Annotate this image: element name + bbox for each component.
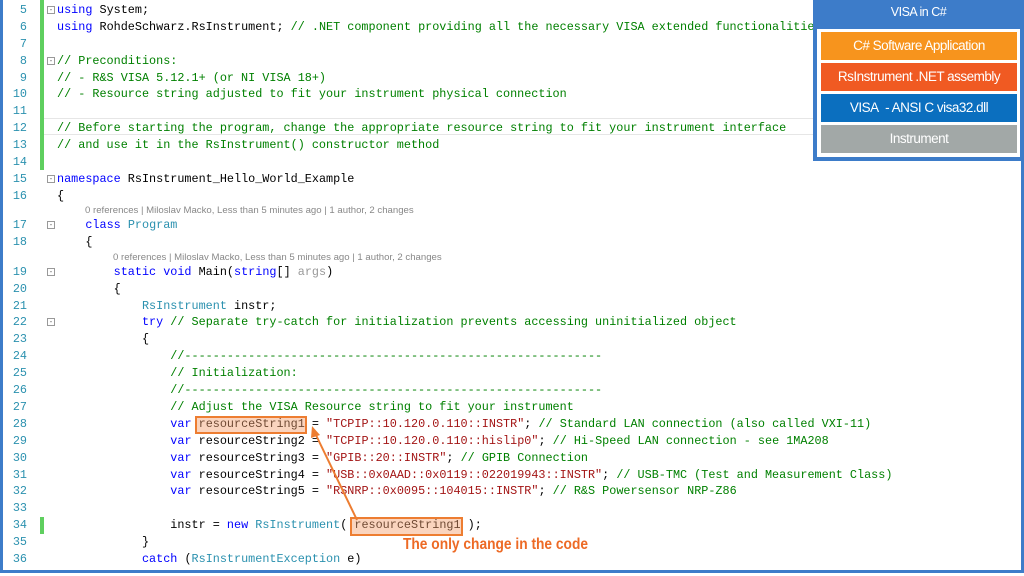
code editor: 23 [13, 332, 27, 346]
code editor: // Adjust the VISA Resource string to fit your instrument [170, 400, 574, 414]
code editor: 36 [13, 552, 27, 566]
code editor: 8 [20, 54, 27, 68]
code editor: 16 [13, 189, 27, 203]
code editor: } [142, 535, 149, 549]
layer: C# Software Application: C# Software Application [853, 38, 985, 53]
highlight: resourceString1 declaration [195, 416, 307, 434]
panel title: VISA in C# [891, 5, 946, 19]
code editor: 25 [13, 366, 27, 380]
panel: VISA in C# [813, 0, 1024, 161]
code editor: - [50, 220, 52, 229]
code editor: // Initialization: [170, 366, 298, 380]
code editor: // - R&S VISA 5.12.1+ (or NI VISA 18+) [57, 71, 326, 85]
code editor: instr = new RsInstrument( resourceString1 ); [170, 518, 482, 532]
code lines [57, 3, 892, 566]
layer: RsInstrument .NET assembly [821, 63, 1017, 91]
code editor: 7 [20, 37, 27, 51]
code editor: 27 [13, 400, 27, 414]
code editor: 13 [13, 138, 27, 152]
code editor: { [114, 282, 121, 296]
code editor: 35 [13, 535, 27, 549]
code editor: 15 [13, 172, 27, 186]
code editor: var resourceString5 = "RSNRP::0x0095::104015::INSTR"; // R&S Powersensor NRP-Z86 [170, 484, 737, 498]
code editor: RsInstrument instr; [142, 299, 276, 313]
code editor: 28 [13, 417, 27, 431]
layer: C# Software Application [821, 32, 1017, 60]
code editor: 14 [13, 155, 27, 169]
code editor: 21 [13, 299, 27, 313]
code editor: 10 [13, 87, 27, 101]
code editor: // Before starting the program, change the appropriate resource string to fit your instrument interface [57, 121, 786, 135]
code editor: 32 [13, 484, 27, 498]
code editor: - [50, 267, 52, 276]
code editor: try // Separate try-catch for initialization prevents accessing uninitialized object [142, 315, 737, 329]
code editor: //----------------------------------------------------------- [170, 349, 602, 363]
code editor: // Preconditions: [57, 54, 177, 68]
code editor: var resourceString2 = "TCPIP::10.120.0.110::hislip0"; // Hi-Speed LAN connection - see 1MA208 [170, 434, 829, 448]
code editor: 26 [13, 383, 27, 397]
code editor: { [57, 189, 64, 203]
code editor: - [50, 5, 52, 14]
code editor: 12 [13, 121, 27, 135]
code editor: 6 [20, 20, 27, 34]
code editor: { [142, 332, 149, 346]
code editor: 22 [13, 315, 27, 329]
code editor: 11 [13, 104, 27, 118]
code editor: 31 [13, 468, 27, 482]
code editor: var resourceString4 = "USB::0x0AAD::0x0119::022019943::INSTR"; // USB-TMC (Test and Measurement Class) [170, 468, 892, 482]
code editor: static void Main(string[] args) [114, 265, 333, 279]
code editor: 29 [13, 434, 27, 448]
change bar [40, 0, 44, 170]
code editor: namespace RsInstrument_Hello_World_Example [57, 172, 354, 186]
code editor: // and use it in the RsInstrument() constructor method [57, 138, 439, 152]
code editor: - [50, 174, 52, 183]
code editor: - [50, 56, 52, 65]
code editor: 0 references | Miloslav Macko, Less than 5 minutes ago | 1 author, 2 changes [113, 252, 442, 263]
line numbers [13, 3, 27, 566]
code editor: using System; [57, 3, 149, 17]
callout text: The only change in the code [403, 536, 588, 553]
layer: VISA ANSI C: VISA - ANSI C visa32.dll [850, 100, 988, 115]
code editor: 30 [13, 451, 27, 465]
code editor: 20 [13, 282, 27, 296]
layer: Instrument: Instrument [890, 131, 948, 146]
code editor: - [50, 317, 52, 326]
layer: RsInstrument .NET assembly: RsInstrument .NET assembly [838, 69, 1000, 84]
code editor: 24 [13, 349, 27, 363]
code editor: var resourceString1 = "TCPIP::10.120.0.110::INSTR"; // Standard LAN connection (also called VXI-11) [170, 417, 871, 431]
code editor: var resourceString3 = "GPIB::20::INSTR"; // GPIB Connection [170, 451, 588, 465]
code editor: 33 [13, 501, 27, 515]
code editor: 5 [20, 3, 27, 17]
layer: Instrument [821, 125, 1017, 153]
code editor: //----------------------------------------------------------- [170, 383, 602, 397]
code editor: using RohdeSchwarz.RsInstrument; // .NET component providing all the necessary VISA extended functionalities [57, 20, 822, 34]
layer: VISA ANSI C [821, 94, 1017, 122]
code editor: // - Resource string adjusted to fit your instrument physical connection [57, 87, 567, 101]
code editor: 18 [13, 235, 27, 249]
code editor: 9 [20, 71, 27, 85]
highlight: resourceString1 usage [350, 517, 463, 536]
code editor: { [85, 235, 92, 249]
codelens annotations: 0 references | Miloslav Macko, Less than 5 minutes ago | 1 author, 2 changes [85, 205, 414, 216]
code editor: 19 [13, 265, 27, 279]
code editor: class Program [85, 218, 177, 232]
code editor: catch (RsInstrumentException e) [142, 552, 361, 566]
code editor: 34 [13, 518, 27, 532]
code editor: 17 [13, 218, 27, 232]
